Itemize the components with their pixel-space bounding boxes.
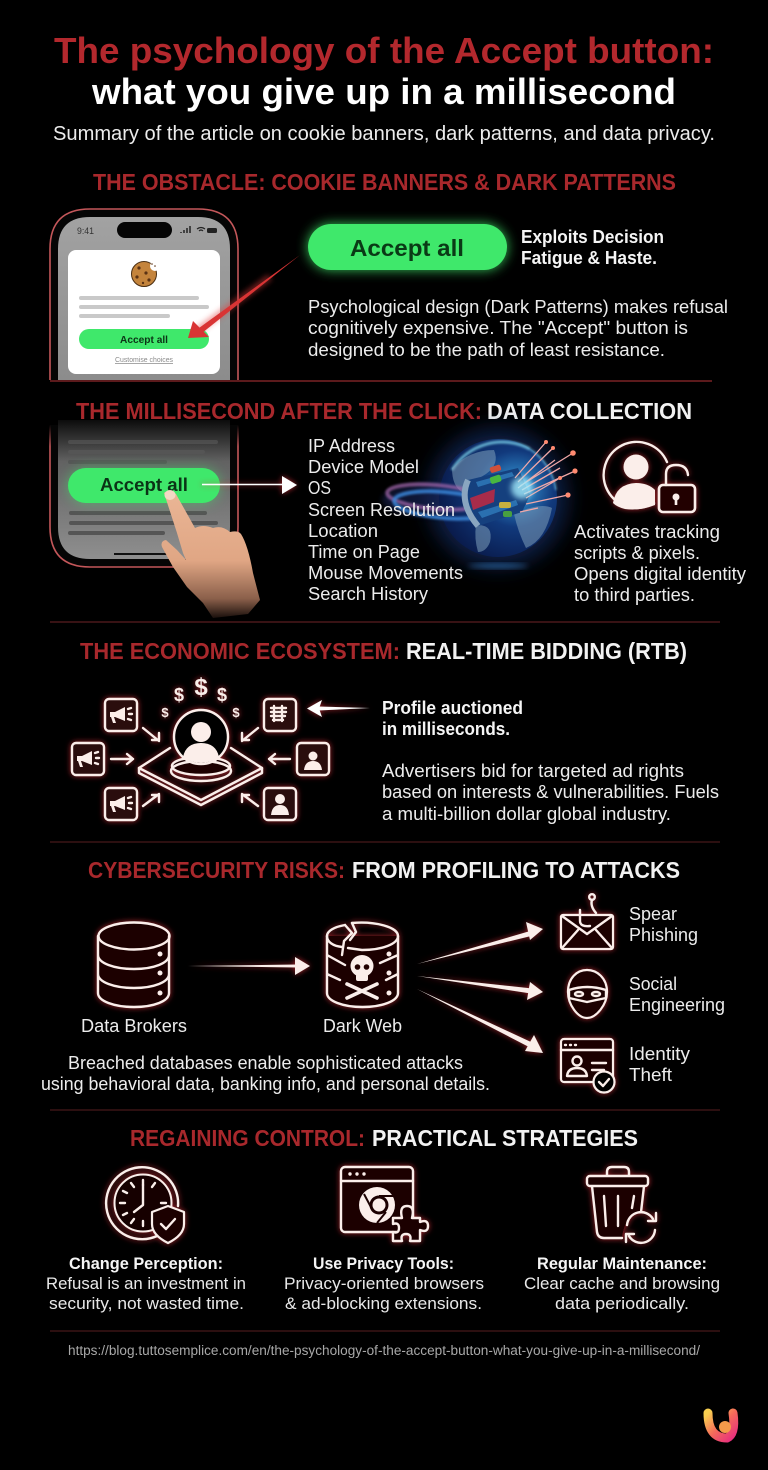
heading: rtb: THE ECONOMIC ECOSYSTEM: bbox=[80, 638, 400, 664]
text: maintenance bbox=[524, 1255, 720, 1313]
text: breached databases: Breached databases enable sophisticated attacks bbox=[68, 1053, 463, 1073]
text: privacy tools: & ad-blocking extensions. bbox=[285, 1295, 482, 1313]
label: dark web: Dark Web bbox=[323, 1016, 402, 1036]
dollar signs: $ bbox=[161, 705, 169, 720]
text: advertisers: based on interests & vulnerabilities. Fuels bbox=[382, 782, 719, 802]
heading: risks: FROM PROFILING TO ATTACKS bbox=[352, 857, 680, 883]
arrow: red pointer bbox=[188, 255, 300, 338]
callout: profile auctioned: in milliseconds. bbox=[382, 719, 510, 739]
text: advertisers bbox=[382, 761, 719, 824]
big accept button: Accept all bbox=[350, 235, 464, 261]
panel: data collection bbox=[50, 398, 746, 618]
callout: profile auctioned: Profile auctioned bbox=[382, 698, 523, 718]
list: collected data bbox=[308, 436, 463, 604]
skull and bones bbox=[347, 955, 377, 998]
title: what you give up in a millisecond bbox=[91, 71, 676, 112]
icon: globe with fibre cable bbox=[382, 428, 578, 568]
dollar signs: $ bbox=[232, 705, 240, 720]
diagram: auction bbox=[72, 674, 329, 820]
dollar signs bbox=[161, 674, 240, 720]
text: privacy tools bbox=[284, 1255, 484, 1313]
small accept button bbox=[79, 329, 209, 349]
big accept button bbox=[308, 224, 507, 270]
icon: clock and shield bbox=[106, 1167, 184, 1243]
icon: social engineering mask bbox=[568, 970, 607, 1018]
label: identity theft: Theft bbox=[629, 1065, 672, 1085]
text: tracking: to third parties. bbox=[574, 585, 695, 605]
phone pressed bbox=[50, 420, 238, 567]
text: tracking bbox=[574, 522, 746, 605]
title: The psychology of the Accept button: bbox=[54, 30, 714, 71]
bidder boxes bbox=[72, 699, 329, 820]
panel: regaining control bbox=[46, 1125, 720, 1313]
title bbox=[54, 30, 714, 112]
list: collected data: Location bbox=[308, 521, 378, 541]
subtitle: Summary of the article on cookie banners, dark patterns, and data privacy. bbox=[53, 123, 715, 145]
heading: data collection: DATA COLLECTION bbox=[487, 398, 692, 424]
callout: exploits: Fatigue & Haste. bbox=[521, 248, 657, 268]
text: change perception: Refusal is an investment in bbox=[46, 1275, 246, 1293]
icon: dark web database bbox=[327, 923, 398, 1007]
platform bbox=[139, 710, 262, 805]
text: change perception: Change Perception: bbox=[69, 1255, 223, 1273]
cookie banner card bbox=[68, 250, 220, 374]
phone with cookie banner: 9:41 bbox=[77, 226, 94, 236]
list: collected data: Mouse Movements bbox=[308, 563, 463, 583]
text: tracking: Activates tracking bbox=[574, 522, 720, 542]
label: social engineering: Engineering bbox=[629, 995, 725, 1015]
text: dark patterns: designed to be the path of least resistance. bbox=[308, 340, 665, 360]
panel: real-time bidding bbox=[72, 638, 719, 824]
text: dark patterns: cognitively expensive. The "Accept" button is bbox=[308, 318, 688, 338]
panel: cybersecurity risks bbox=[41, 857, 725, 1094]
list: collected data: Time on Page bbox=[308, 542, 420, 562]
accept button pressed: Accept all bbox=[100, 475, 188, 495]
text: tracking: scripts & pixels. bbox=[574, 543, 700, 563]
logo bbox=[708, 1413, 734, 1438]
heading: strategies bbox=[130, 1125, 638, 1151]
icon: trash with refresh bbox=[587, 1167, 656, 1243]
source url: https://blog.tuttosemplice.com/en/the-psychology-of-the-accept-button-what-you-give-up-in-a-millisecond/ bbox=[68, 1343, 700, 1358]
list: collected data: Screen Resolution bbox=[308, 500, 455, 520]
text: advertisers: Advertisers bid for targeted ad rights bbox=[382, 761, 684, 781]
label: spear phishing bbox=[629, 904, 698, 945]
phone with cookie banner bbox=[50, 209, 238, 380]
arrows: bids bbox=[111, 728, 290, 806]
icon: identity theft bbox=[561, 1039, 614, 1092]
text: tracking: Opens digital identity bbox=[574, 564, 746, 584]
label: social engineering: Social bbox=[629, 974, 677, 994]
text: change perception: security, not wasted time. bbox=[49, 1295, 244, 1313]
icon: cookie bbox=[132, 261, 160, 286]
small accept button: Accept all bbox=[120, 334, 168, 346]
heading: the obstacle: THE OBSTACLE: COOKIE BANNERS & DARK PATTERNS bbox=[93, 169, 676, 195]
label: social engineering bbox=[629, 974, 725, 1015]
arrow: brokers to dark web bbox=[188, 957, 310, 975]
label: data brokers: Data Brokers bbox=[81, 1016, 187, 1036]
text: change perception bbox=[46, 1255, 246, 1313]
text: maintenance: data periodically. bbox=[555, 1295, 689, 1313]
icon: data brokers database bbox=[98, 922, 170, 1007]
arrows: attacks bbox=[417, 922, 543, 1053]
heading: rtb: REAL-TIME BIDDING (RTB) bbox=[406, 638, 687, 664]
accept button pressed bbox=[68, 468, 220, 503]
text: privacy tools: Privacy-oriented browsers bbox=[284, 1275, 484, 1293]
label: spear phishing: Spear bbox=[629, 904, 677, 924]
dollar signs: $ bbox=[194, 674, 208, 701]
label: identity theft: Identity bbox=[629, 1044, 690, 1064]
text: maintenance: Regular Maintenance: bbox=[537, 1255, 707, 1273]
icon: hand bbox=[162, 490, 260, 618]
text: dark patterns: Psychological design (Dark Patterns) makes refusal bbox=[308, 297, 728, 317]
heading: data collection bbox=[76, 398, 692, 424]
heading: strategies: REGAINING CONTROL: bbox=[130, 1125, 365, 1151]
callout: exploits: Exploits Decision bbox=[521, 227, 664, 247]
text: maintenance: Clear cache and browsing bbox=[524, 1275, 720, 1293]
heading: strategies: PRACTICAL STRATEGIES bbox=[372, 1125, 638, 1151]
text: breached databases: using behavioral data, banking info, and personal details. bbox=[41, 1074, 490, 1094]
list: collected data: Search History bbox=[308, 584, 428, 604]
callout: exploits bbox=[521, 227, 664, 268]
panel: the obstacle bbox=[50, 169, 728, 380]
text: breached databases bbox=[41, 1053, 490, 1094]
arrow: profile auctioned bbox=[307, 700, 370, 717]
heading: rtb bbox=[80, 638, 687, 664]
label: identity theft bbox=[629, 1044, 690, 1085]
text: dark patterns bbox=[308, 297, 728, 360]
heading: risks bbox=[88, 857, 680, 883]
list: collected data: IP Address bbox=[308, 436, 395, 456]
cookie banner card: Customise choices bbox=[115, 355, 173, 364]
dollar signs: $ bbox=[217, 685, 227, 705]
list: collected data: Device Model bbox=[308, 457, 419, 477]
heading: data collection: THE MILLISECOND AFTER THE CLICK: bbox=[76, 398, 482, 424]
icon: browser with plugin bbox=[341, 1167, 428, 1241]
label: spear phishing: Phishing bbox=[629, 925, 698, 945]
dollar signs: $ bbox=[174, 685, 184, 705]
text: advertisers: a multi-billion dollar global industry. bbox=[382, 804, 671, 824]
list: collected data: OS bbox=[308, 478, 331, 498]
arrow: to data list bbox=[202, 476, 297, 494]
icon: user with padlock bbox=[604, 442, 695, 512]
callout: profile auctioned bbox=[382, 698, 523, 739]
icon: spear phishing bbox=[561, 894, 613, 949]
text: privacy tools: Use Privacy Tools: bbox=[313, 1255, 454, 1273]
heading: risks: CYBERSECURITY RISKS: bbox=[88, 857, 345, 883]
